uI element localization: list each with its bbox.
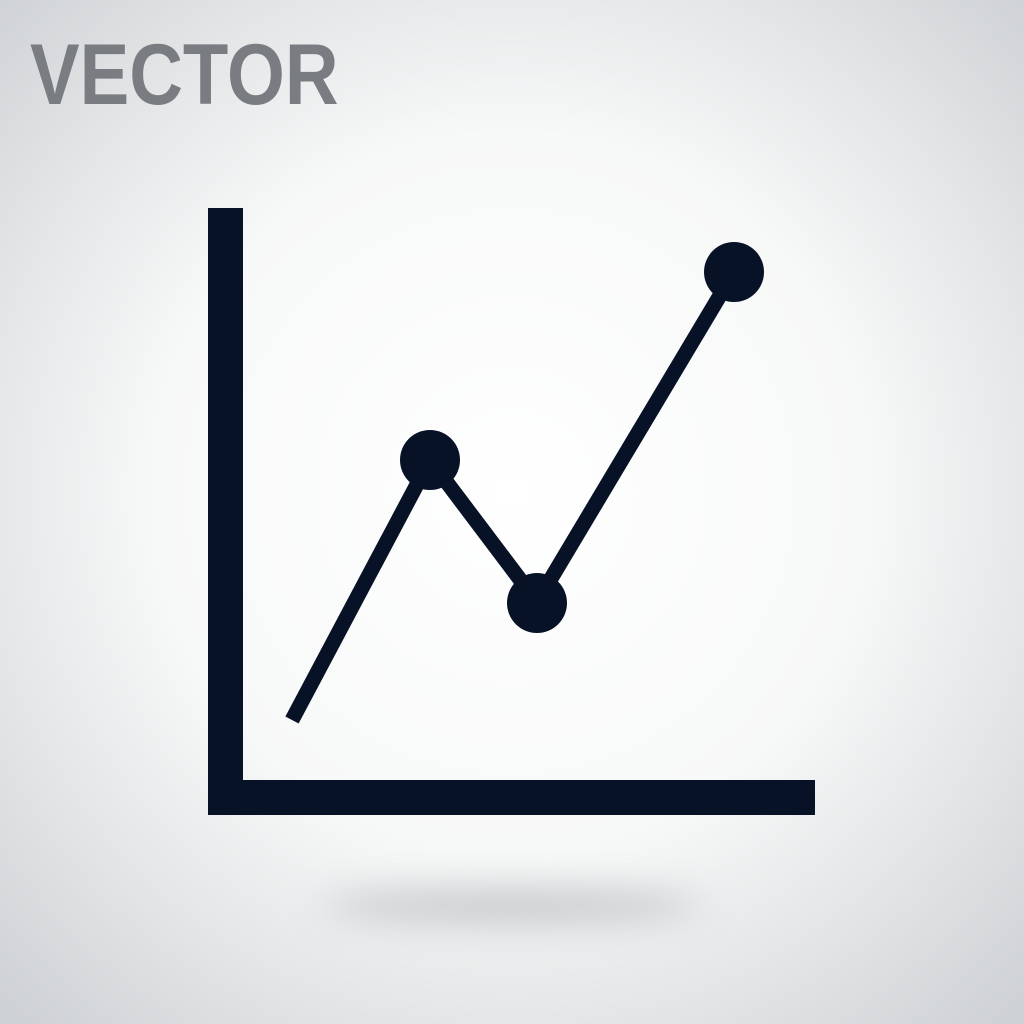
shadow bbox=[322, 890, 702, 922]
chart axes bbox=[208, 208, 815, 815]
title: VECTOR bbox=[30, 27, 339, 123]
line chart bbox=[292, 242, 764, 720]
